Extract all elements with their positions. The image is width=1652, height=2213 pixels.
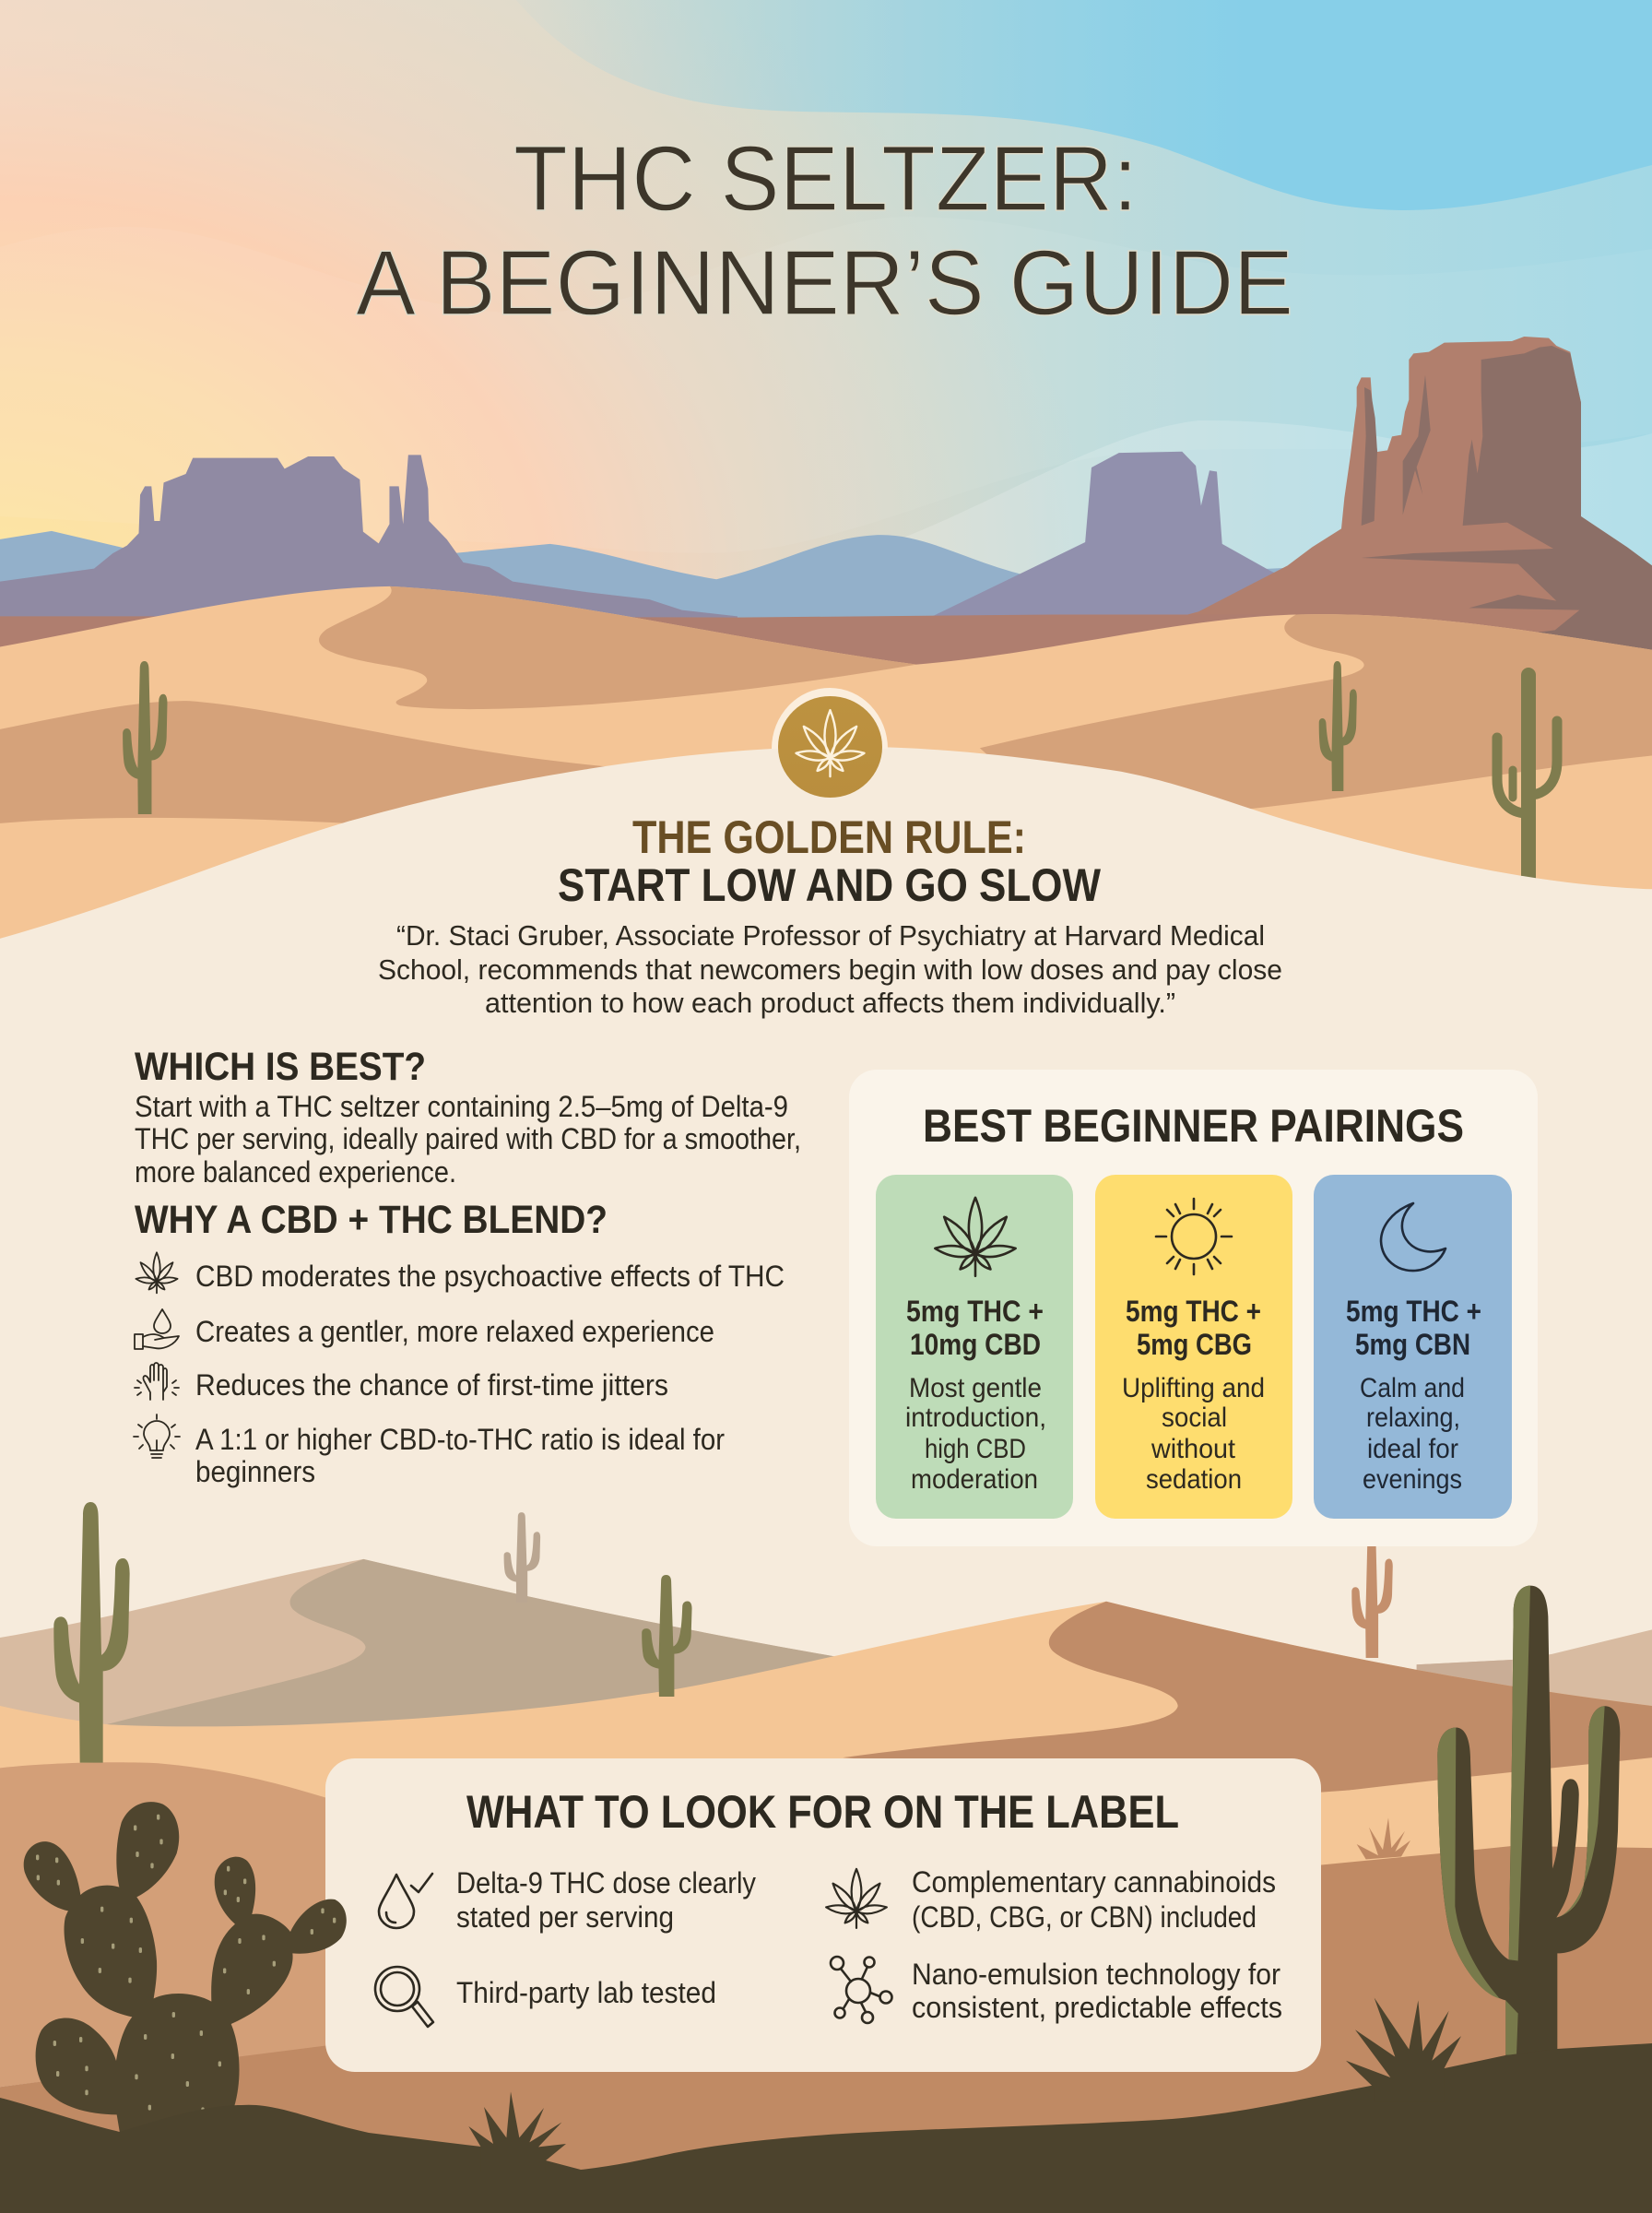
which is best block: Start with a THC seltzer containing 2.5–5mg of Delta-9 [135, 1090, 788, 1123]
item: nano-emulsion [912, 1958, 1282, 2024]
small mid saguaro [642, 1575, 692, 1697]
what to look for panel [325, 1758, 1321, 2072]
card: CBN: 5mg THC + [1346, 1295, 1481, 1328]
right dune bands [1309, 1761, 1652, 2170]
card: CBD: 10mg CBD [910, 1328, 1041, 1361]
medallion [772, 688, 888, 798]
upper dunes [0, 586, 1652, 941]
golden rule heading: THE GOLDEN RULE: [632, 811, 1026, 863]
item: delta-9 dose: Delta-9 THC dose clearly [456, 1866, 756, 1899]
lower dunes [0, 1559, 1652, 2213]
card: CBG: 5mg CBG [1137, 1328, 1252, 1361]
upper right small saguaro [1319, 661, 1357, 791]
item: lab tested: Third-party lab tested [456, 1976, 716, 2009]
card: CBD [876, 1175, 1073, 1519]
why blend list: beginners [195, 1455, 315, 1488]
icon: light bulb [134, 1414, 180, 1458]
card: CBN: ideal for [1367, 1434, 1458, 1464]
pairings heading: BEST BEGINNER PAIRINGS [923, 1100, 1464, 1152]
left tall saguaro [53, 1502, 130, 1763]
expert quote: attention to how each product affects them individually.” [485, 987, 1175, 1019]
golden rule heading: START LOW AND GO SLOW [558, 859, 1102, 911]
icon: hand with drop [135, 1309, 179, 1349]
agave right [1346, 1998, 1461, 2102]
item: nano-emulsion: consistent, predictable effects [912, 1991, 1282, 2024]
card: CBG: without [1150, 1434, 1236, 1464]
foreground ground [0, 2043, 1652, 2213]
card: CBG: 5mg THC + [1126, 1295, 1261, 1328]
card: CBG: sedation [1146, 1464, 1242, 1495]
title [356, 127, 1293, 335]
item: cannabinoids: (CBD, CBG, or CBN) included [912, 1900, 1257, 1934]
right far hills [1417, 1629, 1652, 1756]
sky background [0, 0, 1652, 922]
bullet: moderates: CBD moderates the psychoactive effects of THC [195, 1260, 785, 1293]
card: CBN [1314, 1175, 1512, 1519]
card: CBD: high CBD [925, 1434, 1026, 1464]
item: nano-emulsion: Nano-emulsion technology for [912, 1958, 1280, 1991]
item: delta-9 dose [456, 1866, 756, 1934]
why blend list [134, 1198, 785, 1488]
label heading: WHAT TO LOOK FOR ON THE LABEL [466, 1786, 1179, 1838]
agave bottom [468, 2091, 566, 2172]
distant blue hills [0, 531, 1296, 647]
expert quote: School, recommends that newcomers begin with low doses and pay close [378, 953, 1282, 986]
background distant saguaro faded [504, 1512, 540, 1603]
card: CBG: social [1162, 1402, 1227, 1433]
card: CBD: introduction, [905, 1402, 1046, 1433]
cactus spines [38, 1816, 335, 2134]
icon: magnifier [375, 1967, 433, 2027]
icon: cannabis leaf [935, 1198, 1016, 1276]
card: CBN: 5mg CBN [1355, 1328, 1470, 1361]
card: CBD: moderation [911, 1464, 1038, 1495]
card: CBN: evenings [1363, 1464, 1462, 1495]
icon: moon [1381, 1203, 1446, 1271]
bullet: ratio: A 1:1 or higher CBD-to-THC ratio is ideal for [195, 1423, 725, 1456]
golden rule heading [558, 811, 1102, 911]
center butte [932, 452, 1306, 641]
icon: molecule [831, 1957, 892, 2023]
top left saguaro [123, 661, 167, 814]
which is best block: THC per serving, ideally paired with CBD for a smoother, [135, 1122, 801, 1155]
card: CBG: Uplifting and [1122, 1373, 1265, 1403]
card: CBN: relaxing, [1366, 1402, 1460, 1433]
card: CBD: Most gentle [909, 1373, 1042, 1403]
item: cannabinoids: Complementary cannabinoids [912, 1865, 1276, 1899]
upper right tall saguaro [1497, 675, 1557, 881]
faint agave [1357, 1817, 1410, 1859]
which is best block: more balanced experience. [135, 1155, 456, 1189]
cream hill panel [0, 747, 1652, 2213]
which is best block [135, 1045, 801, 1189]
icon: drop with check [379, 1874, 432, 1928]
which is best block: WHICH IS BEST? [135, 1045, 426, 1089]
title: A BEGINNER’S GUIDE [356, 231, 1293, 335]
prickly pear cactus [24, 1802, 347, 2151]
card: CBD: 5mg THC + [906, 1295, 1044, 1328]
bullet: jitters: Reduces the chance of first-time jitters [195, 1368, 668, 1402]
bullet: gentler: Creates a gentler, more relaxed experience [195, 1315, 714, 1348]
why blend heading: WHY A CBD + THC BLEND? [135, 1198, 608, 1242]
icon: cannabis leaf [826, 1869, 887, 1928]
big right saguaro [1437, 1586, 1620, 2057]
icon: raised hand [135, 1363, 179, 1400]
title: THC SELTZER: [513, 127, 1138, 231]
expert quote: “Dr. Staci Gruber, Associate Professor of Psychiatry at Harvard Medical [396, 919, 1265, 952]
card: CBN: Calm and [1360, 1373, 1465, 1403]
pairings panel [849, 1070, 1538, 1546]
item: delta-9 dose: stated per serving [456, 1900, 674, 1934]
expert quote [378, 919, 1282, 1019]
icon: sun [1156, 1199, 1232, 1274]
right mesa [1152, 337, 1652, 657]
item: cannabinoids [912, 1865, 1276, 1934]
left butte [0, 455, 738, 645]
card: CBG [1095, 1175, 1292, 1519]
icon: leaf [136, 1252, 178, 1293]
orange distant saguaro [1351, 1532, 1393, 1658]
